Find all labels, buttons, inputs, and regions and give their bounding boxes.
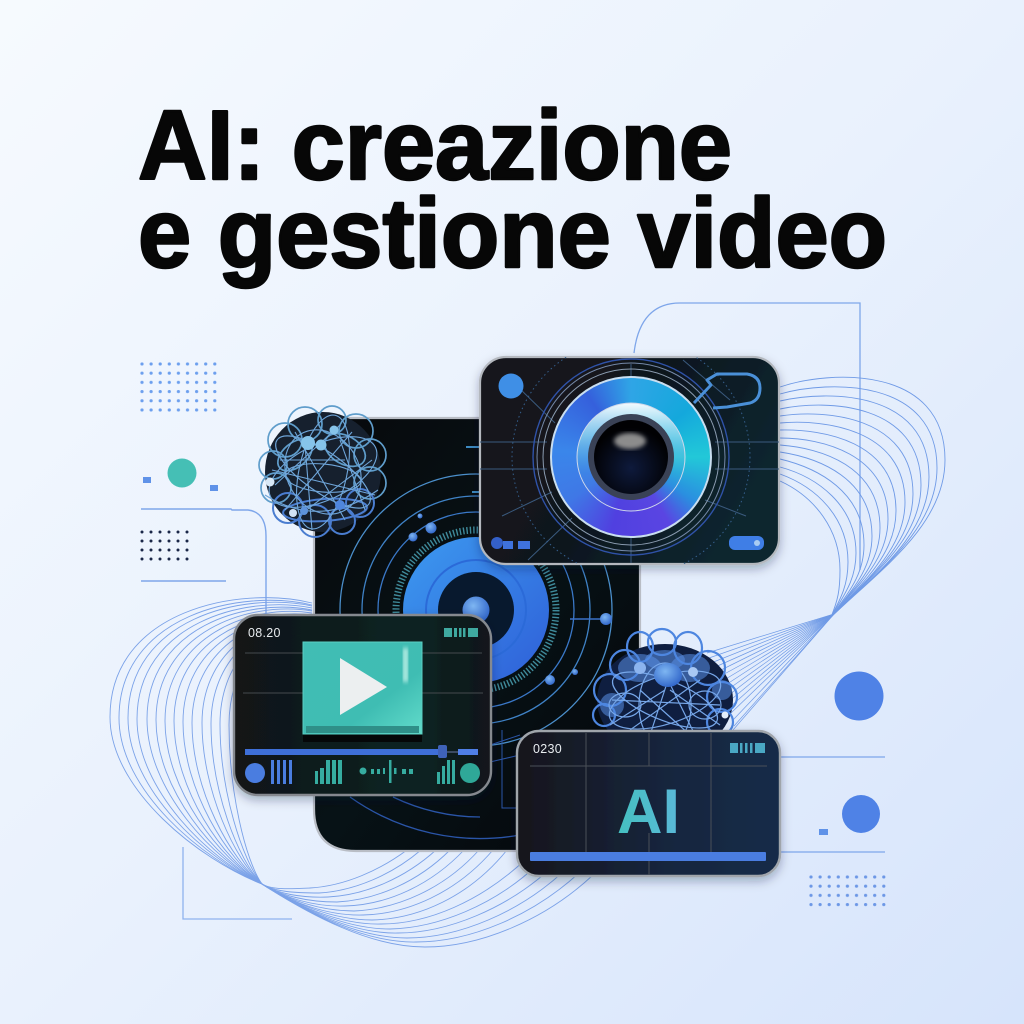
progress slider bbox=[245, 745, 478, 758]
wave lines: left loop bbox=[110, 598, 312, 884]
top-right connector line bbox=[634, 303, 860, 570]
inner web bbox=[608, 662, 722, 730]
bottom controls: teal meters bbox=[315, 760, 480, 784]
translucent bubbles bbox=[600, 650, 732, 717]
card: camera lens bbox=[480, 338, 779, 576]
toggle bbox=[729, 536, 764, 550]
play triangle bbox=[340, 658, 387, 715]
top-right status blocks bbox=[730, 743, 765, 753]
underline bbox=[141, 580, 226, 582]
central disc bbox=[396, 530, 556, 690]
progress bar bbox=[530, 852, 766, 861]
outer loops bbox=[593, 629, 737, 735]
orbit nodes bbox=[408, 514, 612, 685]
lens inner ring bbox=[577, 403, 685, 511]
nugget: lower neural sphere bbox=[592, 628, 738, 730]
horizontal rules bbox=[780, 757, 885, 852]
bottom controls: blue bbox=[245, 760, 292, 784]
wave lines: right loop bbox=[780, 377, 945, 617]
left decoration cluster bbox=[138, 360, 266, 615]
teal circle bbox=[168, 458, 196, 488]
reticle lines bbox=[480, 357, 779, 564]
grid lines bbox=[530, 733, 767, 875]
play button bbox=[303, 642, 422, 742]
small squares bbox=[143, 477, 218, 491]
AI label: AI bbox=[617, 777, 680, 847]
connector line to panel bbox=[141, 509, 266, 615]
highlights bbox=[634, 662, 728, 718]
small indicators bbox=[491, 537, 530, 549]
small square bbox=[819, 829, 828, 835]
top-right status blocks bbox=[444, 628, 478, 637]
status dot bbox=[498, 374, 524, 398]
card: AI module bbox=[517, 731, 780, 876]
lens glass bbox=[588, 414, 674, 500]
panel: central dark tablet bbox=[314, 418, 640, 851]
inner web bbox=[259, 410, 387, 534]
bottom-left connector line bbox=[183, 847, 292, 919]
blue dot grid lower right bbox=[806, 872, 888, 909]
wave lines: fan to lower nugget bbox=[707, 614, 834, 730]
lens outer ring bbox=[550, 376, 712, 538]
large blue circle bbox=[834, 672, 884, 720]
nugget: upper neural sphere bbox=[259, 406, 387, 537]
right decoration cluster bbox=[780, 672, 888, 909]
timecode: 0230 bbox=[533, 742, 562, 756]
title: e gestione video bbox=[138, 178, 887, 288]
title: AI: creazione bbox=[138, 90, 732, 200]
orbit arcs bbox=[340, 447, 612, 839]
card: video player bbox=[234, 615, 491, 795]
timecode: 08.20 bbox=[248, 626, 281, 640]
guide lines bbox=[243, 653, 483, 693]
wave lines: lower sweep bbox=[262, 850, 593, 947]
title bbox=[138, 90, 887, 288]
outer loops bbox=[259, 406, 386, 503]
highlights bbox=[266, 426, 345, 517]
blue dot grid bbox=[138, 360, 220, 415]
hook icon bbox=[694, 374, 760, 408]
dark dot grid bbox=[138, 528, 192, 564]
medium blue circle bbox=[842, 795, 880, 833]
